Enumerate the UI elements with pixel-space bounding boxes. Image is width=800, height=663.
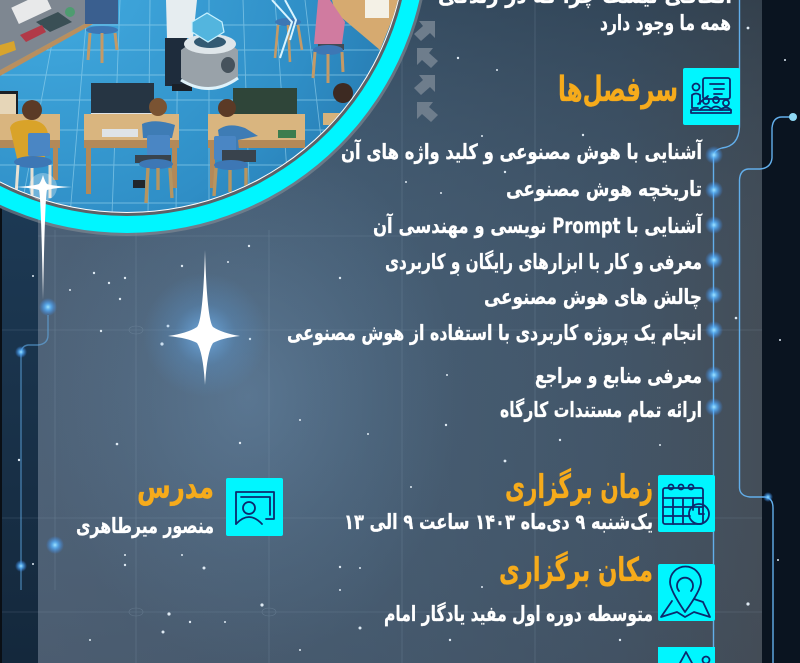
small sparkle star <box>15 173 72 300</box>
scientist <box>165 0 197 91</box>
topics list: معرفی منابع و مراجع <box>535 364 702 388</box>
large sparkle star <box>143 250 267 397</box>
icon: instructor <box>226 478 283 536</box>
instructor text: مدرس <box>137 467 214 506</box>
topics list: ارائه تمام مستندات کارگاه <box>500 397 702 422</box>
date text: زمان برگزاری <box>505 467 653 507</box>
location text: مکان برگزاری <box>499 550 653 590</box>
circuit lines left <box>15 298 64 590</box>
icon: calendar <box>658 475 715 532</box>
circuit lines right <box>705 0 797 663</box>
topics list <box>287 139 703 422</box>
centre student desk <box>84 83 179 203</box>
icon: topics <box>683 68 740 125</box>
date text <box>344 467 653 534</box>
heading: topics: سرفصل‌ها <box>558 70 678 110</box>
left student desk <box>0 91 60 200</box>
intro text: همه ما وجود دارد <box>600 11 731 35</box>
topics list: آشنایی با هوش مصنوعی و کلید واژه های آن <box>341 139 703 164</box>
location text: متوسطه دوره اول مفید یادگار امام <box>384 601 653 626</box>
workshop illustration circle <box>0 0 430 236</box>
back left desk <box>0 0 118 76</box>
wireframe figure and stool <box>272 0 302 62</box>
topics list: آشنایی با Prompt نویسی و مهندسی آن <box>373 213 703 238</box>
topics list: تاریخچه هوش مصنوعی <box>506 177 702 201</box>
topics list: چالش های هوش مصنوعی <box>484 285 702 309</box>
right student desk <box>208 88 305 196</box>
instructor text: منصور میرطاهری <box>76 514 214 538</box>
icon: location <box>658 564 715 621</box>
list dots <box>705 146 723 416</box>
hologram device <box>181 13 238 89</box>
far right person <box>323 83 353 125</box>
location text <box>384 550 653 626</box>
floor grid <box>0 0 400 215</box>
intro text <box>438 0 732 35</box>
icon: partially visible bottom <box>658 647 715 663</box>
right person and desk <box>313 0 400 83</box>
instructor text <box>76 467 214 538</box>
decorative arrows <box>414 21 438 122</box>
date text: یک‌شنبه ۹ دی‌ماه ۱۴۰۳ ساعت ۹ الی ۱۳ <box>344 510 653 534</box>
